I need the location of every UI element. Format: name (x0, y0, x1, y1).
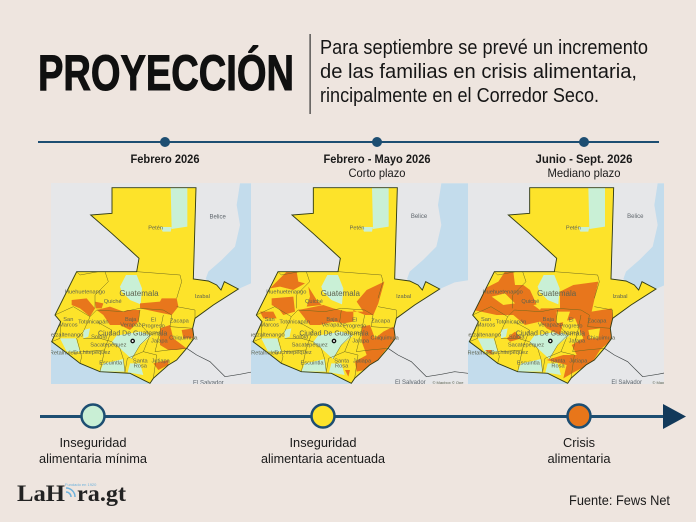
place labels, map 3: Santa (551, 358, 566, 364)
title: PROYECCIÓN (38, 45, 294, 101)
place labels, map 2: Quetzaltenango (245, 333, 285, 339)
place labels, map 2: Baja (326, 317, 339, 323)
place labels, map 2: Belice (411, 214, 428, 220)
place labels, map 1: Santa (133, 358, 149, 364)
orange areas, map 2 (260, 272, 397, 377)
place labels, map 1: Jalapa (151, 339, 169, 345)
legend label: stressed: alimentaria acentuada (261, 451, 386, 466)
place labels, map 2: Suchitepéquez (274, 350, 312, 356)
place labels, map 1: Izabal (195, 294, 210, 300)
place labels, map 3: Quiché (521, 299, 539, 305)
legend timeline arrow (40, 404, 686, 429)
intro text: Para septiembre se prevé un incremento (320, 37, 648, 59)
legend label: stressed: Inseguridad (290, 435, 356, 450)
place labels, map 3 (461, 214, 665, 386)
capital marker, map 2 (332, 339, 336, 343)
legend marker: stressed (312, 404, 334, 428)
place labels, map 3: Baja (543, 317, 555, 323)
intro text: de las familias en crisis alimentaria, (320, 61, 637, 83)
place labels, map 2: Jutiapa (353, 359, 372, 365)
place labels, map 1: Rosa (134, 364, 148, 370)
period label: Junio - Sept. 2026: Mediano plazo (548, 166, 621, 180)
place labels, map 1: Chiquimula (169, 336, 198, 342)
place labels, map 2: Guatemala (321, 289, 360, 298)
place labels, map 2: Progreso (343, 323, 366, 329)
place labels, map 3: Jutiapa (569, 359, 588, 365)
logo: ra.gt (77, 481, 126, 506)
place labels, map 2: Sacatepéquez (292, 342, 328, 348)
place labels, map 1: Petén (148, 226, 163, 232)
place labels, map 1: Quetzaltenango (43, 333, 83, 339)
place labels, map 1: Progreso (142, 323, 165, 329)
place labels, map 1: San (63, 317, 73, 323)
place labels, map 3: Guatemala (537, 289, 577, 298)
place labels, map 3: Zacapa (588, 319, 607, 325)
place labels, map 2: Santa (334, 358, 350, 364)
legend label: crisis: alimentaria (548, 451, 611, 466)
place labels, map 2: Zacapa (371, 319, 391, 325)
divider line (310, 34, 311, 114)
place labels, map 3: El Salvador (611, 380, 642, 386)
place labels, map 3: Quetzaltenango (461, 333, 501, 339)
place labels, map 1: Baja (125, 317, 137, 323)
intro text (320, 37, 648, 107)
place labels, map 2: Escuintla (301, 360, 324, 366)
place labels, map 3: Huehuetenango (483, 290, 523, 296)
place labels, map 3: Verapaz (538, 323, 559, 329)
place labels, map 3: Marcos (477, 323, 495, 329)
place labels, map 2: Marcos (260, 323, 279, 329)
period label: Febrero - Mayo 2026 (324, 152, 431, 180)
period label: Junio - Sept. 2026 (536, 152, 633, 180)
place labels, map 2: Totonicapán (279, 320, 310, 326)
place labels, map 1: Ciudad De Guatemala (98, 331, 167, 338)
place labels, map 3: Belice (627, 214, 644, 220)
place labels, map 3: San (481, 317, 491, 323)
place labels, map 3: Ciudad De Guatemala (516, 331, 585, 338)
orange areas, map 3 (473, 272, 613, 378)
place labels, map 3: Retalhuleu (467, 350, 495, 356)
place labels, map 2: Rosa (335, 364, 349, 370)
place labels, map 2: El (352, 318, 357, 324)
legend label: minimal: Inseguridad (60, 435, 126, 450)
period label: Febrero 2026: Febrero 2026 (130, 152, 200, 166)
source: Fuente: Fews Net (569, 492, 670, 508)
place labels, map 1: Quiché (104, 299, 122, 305)
logo (17, 481, 126, 506)
period label: Junio - Sept. 2026: Junio - Sept. 2026 (536, 152, 633, 166)
place labels, map 2: El Salvador (395, 380, 426, 386)
place labels, map 1 (43, 215, 226, 387)
place labels, map 1: Sacatepéquez (90, 342, 127, 348)
place labels, map 1: El Salvador (193, 381, 224, 387)
place labels, map 2 (245, 214, 464, 386)
place labels, map 1: Totonicapán (78, 320, 109, 326)
legend marker: minimal (82, 404, 104, 428)
place labels, map 2: Izabal (396, 294, 411, 300)
place labels, map 3: Sololá (509, 334, 525, 340)
logo: Fundado en 1920 (65, 482, 97, 487)
place labels, map 1: Jutiapa (152, 359, 171, 365)
place labels, map 1: Suchitepéquez (73, 350, 111, 356)
legend label: crisis: Crisis (563, 435, 595, 450)
place labels, map 2: Retalhuleu (251, 350, 278, 356)
map: Febrero - Mayo 2026 (245, 183, 468, 386)
capital marker, map 3 (549, 339, 552, 343)
place labels, map 2: Ciudad De Guatemala (299, 331, 369, 338)
intro text: rincipalmente en el Corredor Seco. (320, 85, 599, 107)
map: Febrero 2026 (43, 183, 251, 387)
legend label: stressed (261, 435, 386, 466)
place labels, map 3: Jalapa (569, 339, 586, 345)
place labels, map 1: Huehuetenango (65, 290, 105, 296)
place labels, map 2: © Mapbox © Ope (432, 380, 464, 385)
legend label: crisis (548, 435, 611, 466)
place labels, map 3: Petén (566, 226, 581, 232)
top timeline (38, 137, 659, 147)
place labels, map 1: Escuintla (99, 360, 123, 366)
legend marker: crisis (568, 404, 590, 428)
place labels, map 3: Totonicapán (496, 320, 526, 326)
place labels, map 3: Progreso (560, 323, 582, 329)
place labels, map 3: Sacatepéquez (508, 342, 544, 348)
place labels, map 2: Chiquimula (371, 336, 400, 342)
place labels, map 3: Izabal (612, 294, 628, 300)
place labels, map 3: Suchitepéquez (491, 350, 528, 356)
place labels, map 1: Retalhuleu (50, 350, 77, 356)
place labels, map 3: © Map (652, 380, 665, 385)
period label: Febrero - Mayo 2026: Febrero - Mayo 2026 (324, 152, 431, 166)
place labels, map 2: Jalapa (352, 339, 370, 345)
orange areas, map 1 (72, 298, 193, 370)
place labels, map 1: Sololá (91, 334, 108, 340)
logo: LaH (17, 481, 65, 506)
place labels, map 2: Petén (350, 226, 364, 232)
place labels, map 1: El (151, 318, 156, 324)
place labels, map 2: Huehuetenango (266, 290, 306, 296)
capital marker, map 1 (131, 339, 134, 343)
legend label: minimal (39, 435, 148, 466)
place labels, map 1: Belice (209, 215, 226, 221)
map: Junio - Sept. 2026 (461, 183, 665, 386)
place labels, map 1: Guatemala (119, 289, 159, 298)
place labels, map 3: Rosa (551, 364, 565, 370)
place labels, map 2: Sololá (292, 334, 309, 340)
place labels, map 2: Verapaz (322, 323, 343, 329)
place labels, map 2: San (265, 317, 275, 323)
place labels, map 3: El (568, 318, 574, 324)
legend label: minimal: alimentaria mínima (39, 451, 148, 466)
place labels, map 3: Escuintla (517, 360, 541, 366)
period label: Febrero - Mayo 2026: Corto plazo (348, 166, 406, 180)
place labels, map 3: Chiquimula (587, 336, 616, 342)
place labels, map 1: Zacapa (170, 319, 190, 325)
place labels, map 1: Verapaz (120, 323, 141, 329)
place labels, map 1: Marcos (59, 323, 78, 329)
place labels, map 2: Quiché (305, 299, 323, 305)
